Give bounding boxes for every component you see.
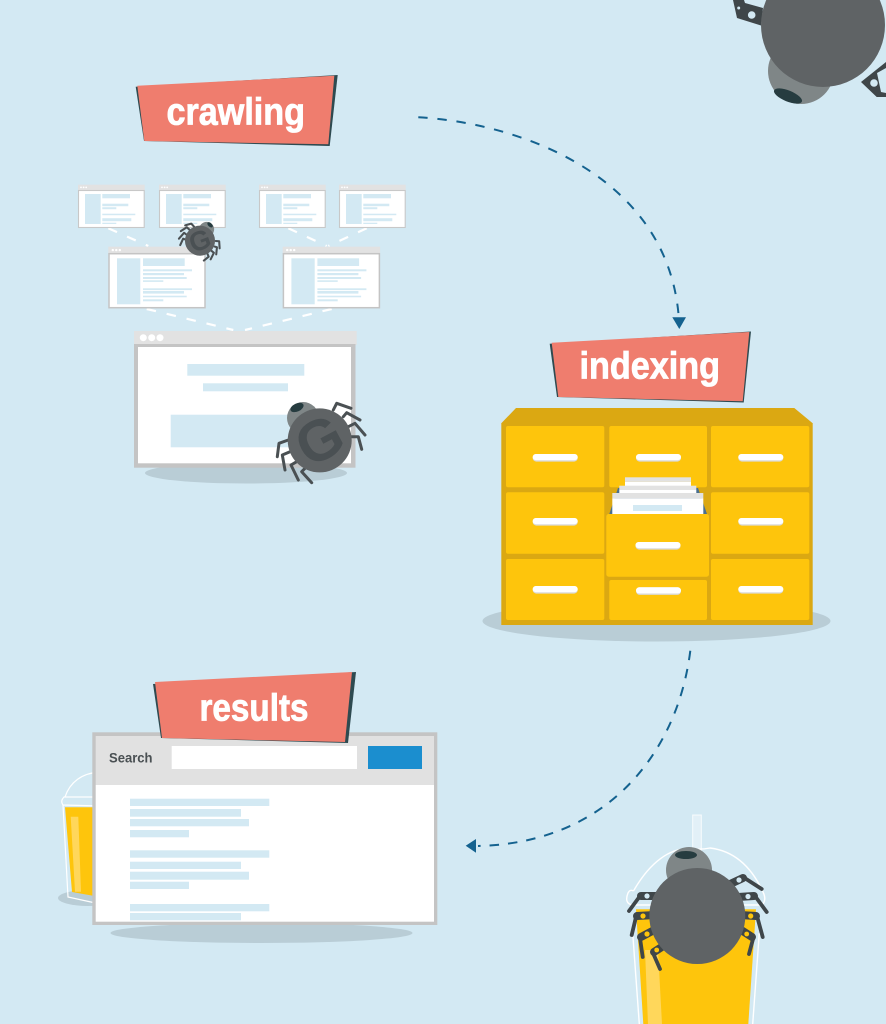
small page window 1 [78,185,145,228]
banner: crawling: crawling [166,91,305,133]
open drawer [606,514,709,577]
search button [368,746,422,769]
leg holes [640,877,753,952]
small page window 2 [159,185,226,228]
juice cup with spider [627,815,767,1024]
results shadow [110,923,412,943]
site tree: white connector dashes [108,228,367,330]
banner: indexing [550,332,751,402]
spider: small with G [174,215,225,268]
spider: small with G: G [185,222,215,259]
medium page window right [283,247,380,308]
spider head [666,847,712,893]
left juice cup shadow [58,890,118,906]
arrow: indexing to results [466,651,690,853]
straw [693,815,701,851]
small page window 3 [259,185,326,228]
spider leg plates [637,878,756,952]
juice highlight [645,950,662,1024]
search results window [92,732,437,925]
open drawer files [609,477,707,514]
spider: large with G: G [285,401,355,480]
banner: results: results [200,688,308,730]
large page shadow [145,462,347,484]
banner: results [153,672,356,743]
drawer handles [533,454,783,595]
banner: indexing: indexing [580,346,720,388]
result rows [130,799,269,920]
spider body [649,868,745,964]
juice [636,909,756,1024]
filing cabinet [501,408,813,625]
search label: Search [109,750,152,766]
cup outline [633,933,759,1024]
left juice cup [62,772,100,904]
search input [172,746,357,769]
medium page window left [108,247,206,308]
spider: top right corner [733,0,886,107]
drawers [506,426,809,620]
dome lid [627,848,765,905]
banner: crawling [136,75,338,146]
spider leg tips [629,877,767,969]
cabinet shadow [482,600,830,642]
large page window [134,331,357,468]
arrow: crawling to indexing [418,117,686,329]
small page window 4 [339,185,406,228]
